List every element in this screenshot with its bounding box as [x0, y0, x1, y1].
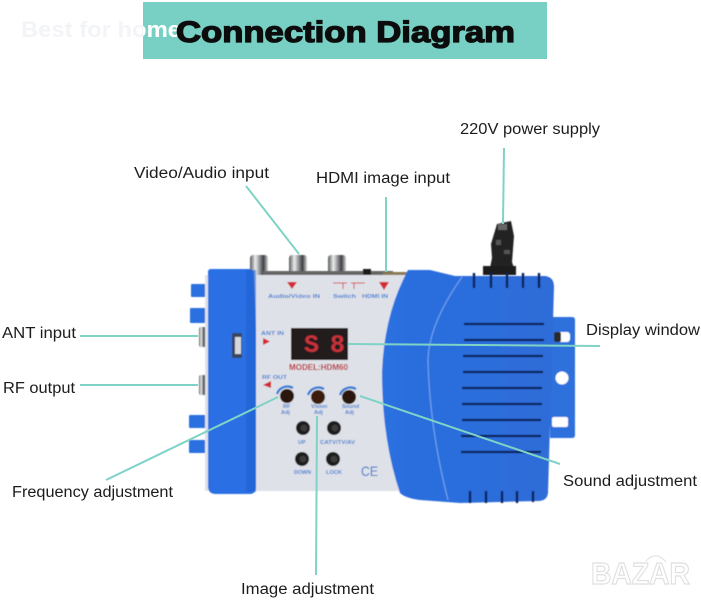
model text: MODEL:HDM60 [289, 362, 348, 372]
right mounting bracket [550, 317, 575, 438]
callout: Sound adjustment: Sound adjustment [563, 473, 698, 490]
callout: Display window: Display window [586, 322, 701, 339]
adjustment knobs: Adj [281, 410, 290, 416]
display window: S8 [304, 331, 345, 360]
power plug [483, 221, 516, 275]
control buttons: LOCK [326, 470, 342, 476]
control buttons: DOWN [294, 470, 311, 476]
adjustment knobs: Adj [345, 410, 354, 416]
callout: Video/Audio input [134, 165, 299, 254]
callout: Video/Audio input: Video/Audio input [134, 165, 270, 182]
modulator device [189, 221, 575, 503]
watermark: Best for home [22, 21, 178, 37]
faceplate labels and markings [261, 282, 389, 388]
faceplate labels and markings: Audio/Video IN [268, 294, 320, 300]
faceplate labels and markings: Switch [333, 294, 357, 300]
title banner [21, 2, 547, 59]
callout: Sound adjustment [360, 396, 698, 490]
adjustment knobs: RF [283, 404, 291, 410]
watermark: Best for home: Best for home [21, 17, 181, 42]
title: Connection Diagram [176, 16, 515, 49]
left mounting tabs [189, 284, 206, 453]
faceplate [205, 275, 420, 491]
horizontal vents [461, 324, 544, 452]
top and bottom vents [470, 273, 539, 503]
right blue housing with speaker vents [382, 270, 554, 503]
watermark: Best for home: Best for home [21, 17, 181, 42]
adjustment knobs: Adj [314, 410, 323, 416]
control buttons: CATV/TV/AV [320, 440, 355, 446]
left blue side panel [208, 269, 256, 494]
display window [291, 328, 348, 360]
faceplate labels and markings: ANT IN [261, 331, 284, 337]
callout: Frequency adjustment: Frequency adjustment [12, 484, 174, 501]
callout: HDMI image input: HDMI image input [316, 170, 451, 187]
watermark: BAZAR: BAZAR [591, 556, 690, 591]
ANT and RF side connectors [199, 327, 206, 395]
control buttons [294, 421, 355, 476]
control buttons: UP [298, 440, 306, 446]
callout: Frequency adjustment [12, 397, 278, 501]
adjustment knobs [277, 386, 359, 416]
adjustment knobs: Vision [311, 404, 328, 410]
callout: HDMI image input [316, 170, 451, 272]
callout: Image adjustment: Image adjustment [241, 581, 375, 598]
callout: ANT input: ANT input [2, 325, 77, 342]
CE mark: CE [361, 463, 378, 479]
callout: RF output: RF output [3, 380, 76, 397]
faceplate labels and markings: HDMI IN [362, 294, 388, 300]
callout: 220V power supply: 220V power supply [460, 121, 600, 138]
adjustment knobs: Sound [342, 404, 359, 410]
faceplate labels and markings: RF OUT [262, 375, 288, 381]
top RCA connectors [250, 255, 409, 277]
